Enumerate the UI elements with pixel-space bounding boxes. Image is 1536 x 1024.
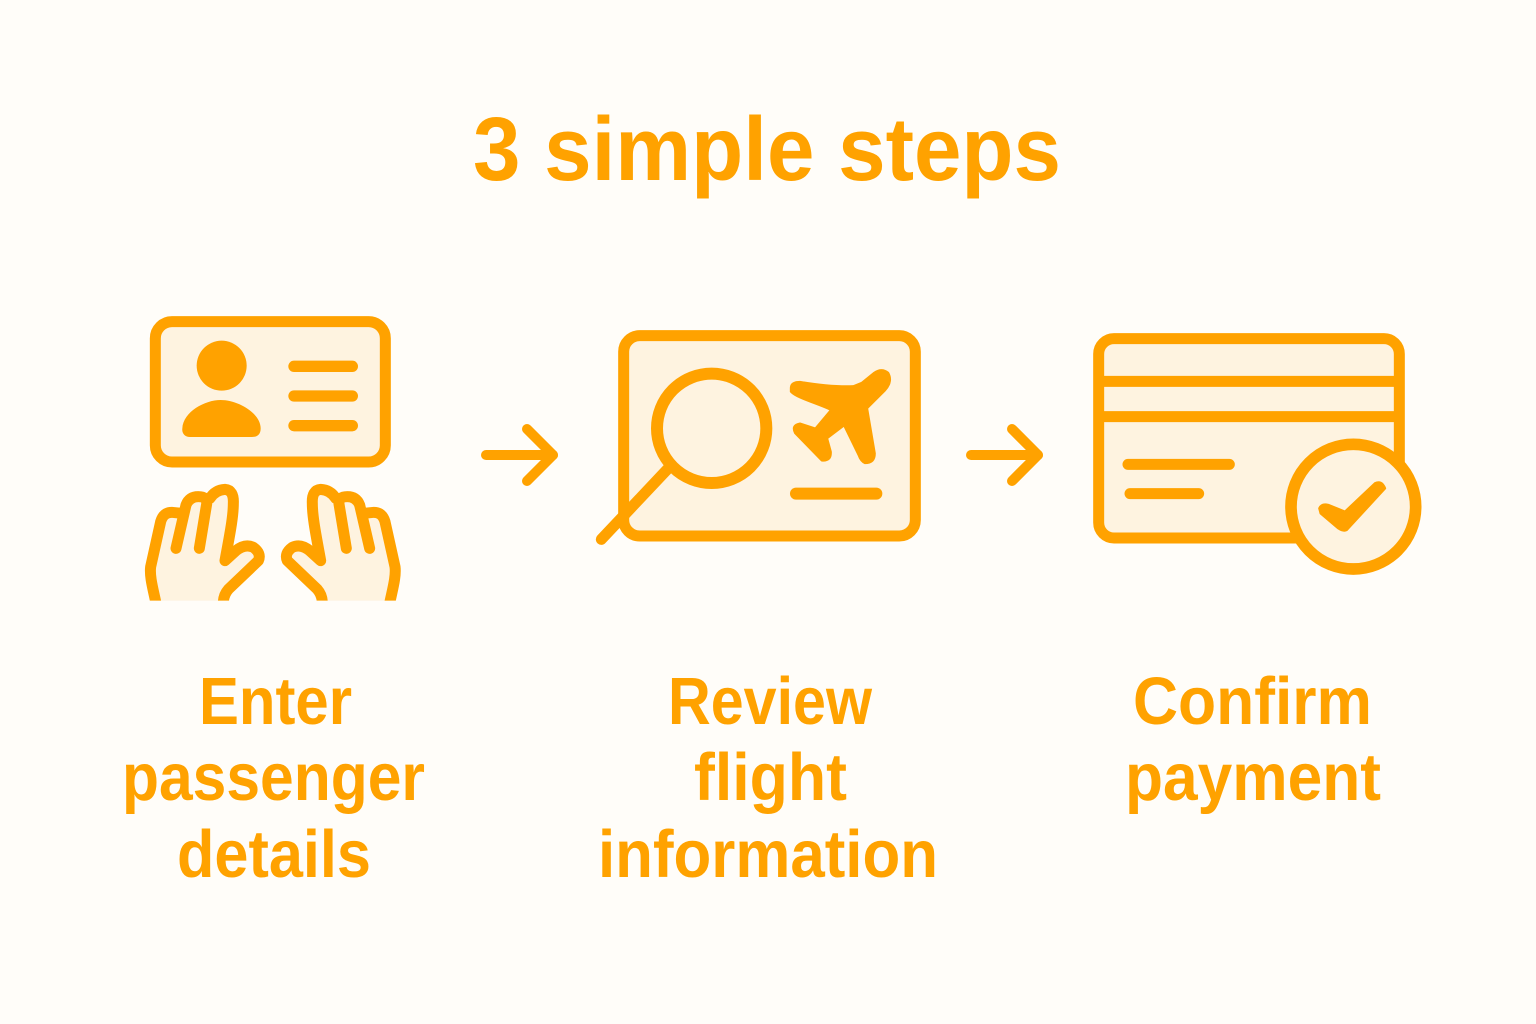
label: step 1 (122, 664, 425, 892)
arrow: step 1 to step 2 (486, 429, 553, 481)
label: step 1: passenger (122, 740, 425, 815)
label: step 2: information (598, 817, 938, 892)
ticket card (624, 336, 915, 536)
left hand (150, 489, 259, 603)
label: step 1: details (177, 817, 371, 892)
label: step 3: payment (1125, 740, 1381, 815)
icon: person (182, 341, 261, 437)
icon: magnifier (601, 374, 766, 539)
id card (155, 322, 385, 462)
label: step 3 (1125, 664, 1381, 815)
text line (796, 476, 876, 512)
right hand (286, 489, 395, 603)
icon: plane (791, 370, 890, 463)
icon: hands (150, 489, 395, 603)
arrow: step 2 to step 3 (971, 429, 1038, 481)
icon: passenger details card with typing hands (150, 322, 395, 603)
title: 3 simple steps (473, 100, 1061, 200)
label: step 2 (598, 664, 938, 892)
icon: check badge (1291, 444, 1416, 569)
label: step 2: Review (668, 664, 873, 739)
label: step 2: flight (694, 740, 847, 815)
icon: flight review card with magnifier (601, 336, 915, 539)
icon: payment card with check (1099, 339, 1416, 569)
label: step 3: Confirm (1133, 664, 1372, 739)
text lines (294, 366, 352, 426)
credit card (1099, 339, 1399, 538)
label: step 1: Enter (199, 664, 352, 739)
